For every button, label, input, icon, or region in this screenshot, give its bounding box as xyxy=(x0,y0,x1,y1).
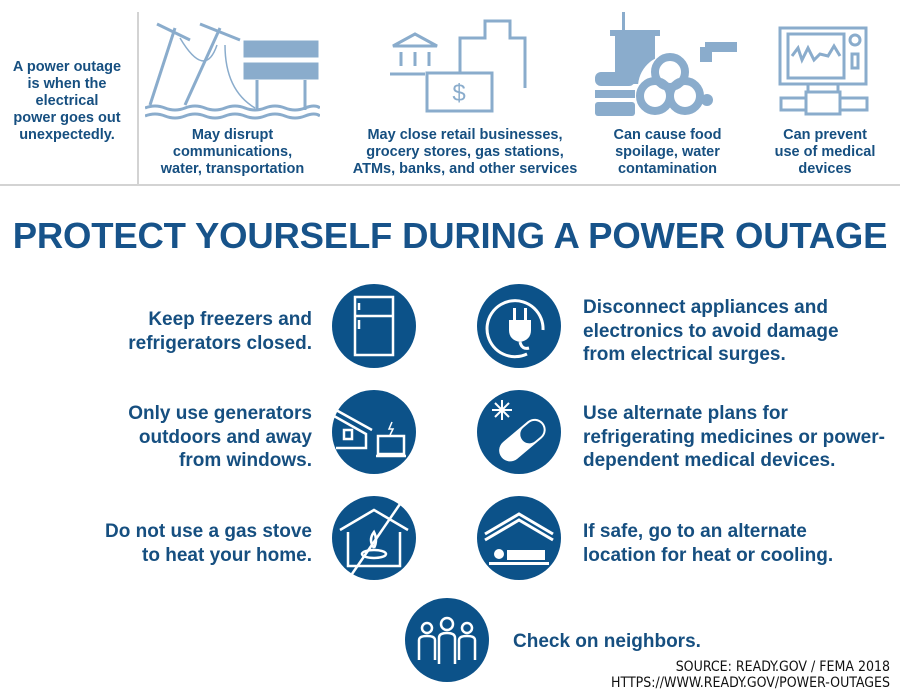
tip: generators: Only use generators xyxy=(128,403,312,424)
icon: fridge xyxy=(332,284,416,368)
tip: gas stove: to heat your home. xyxy=(142,544,312,566)
icon: poles and barricade xyxy=(145,22,320,120)
tip: medicines: Use alternate plans for xyxy=(583,403,788,424)
definition text: unexpectedly. xyxy=(19,127,115,143)
icon: no gas stove xyxy=(332,496,416,580)
caption: food spoilage xyxy=(614,127,721,177)
tip: medicines xyxy=(583,403,885,471)
tip: generators: from windows. xyxy=(179,450,312,471)
caption: medical devices: Can prevent xyxy=(783,127,867,143)
icon: neighbors xyxy=(405,598,489,682)
caption: close businesses: May close retail businesses, xyxy=(367,127,563,143)
icon: house and generator xyxy=(332,390,416,474)
tip: freezers: refrigerators closed. xyxy=(128,332,312,354)
source xyxy=(611,659,890,691)
caption: close businesses: ATMs, banks, and other services xyxy=(353,161,577,177)
tip: disconnect: Disconnect appliances and xyxy=(583,297,828,318)
caption: disrupt: water, transportation xyxy=(161,161,304,177)
definition text xyxy=(13,59,121,143)
tip: medicines: refrigerating medicines or power- xyxy=(583,426,885,448)
vertical divider xyxy=(137,12,139,184)
tip: disconnect: from electrical surges. xyxy=(583,344,786,365)
icon: shelter xyxy=(477,496,561,580)
caption: close businesses: grocery stores, gas stations, xyxy=(366,144,564,160)
caption: disrupt xyxy=(160,127,304,177)
tip: freezers xyxy=(128,309,312,354)
tip: neighbors: Check on neighbors. xyxy=(513,631,701,652)
tip: gas stove: Do not use a gas stove xyxy=(105,521,312,542)
tip: alternate location: location for heat or cooling. xyxy=(583,544,833,566)
icon: buildings and money xyxy=(390,20,526,112)
icon: buildings and money: $ xyxy=(452,80,466,107)
tip: alternate location xyxy=(583,521,833,566)
tip: disconnect xyxy=(583,297,839,365)
source: HTTPS://WWW.READY.GOV/POWER-OUTAGES xyxy=(611,675,890,691)
top strip bottom border xyxy=(0,184,900,186)
caption: food spoilage: contamination xyxy=(618,161,717,177)
definition text: power goes out xyxy=(13,110,121,126)
definition text: electrical xyxy=(36,93,98,109)
definition text: A power outage xyxy=(13,59,121,75)
icon: food and biohazard xyxy=(595,12,737,116)
title: PROTECT YOURSELF DURING A POWER OUTAGE xyxy=(13,215,887,256)
tip: disconnect: electronics to avoid damage xyxy=(583,320,839,342)
icon: pill and snowflake xyxy=(477,390,561,474)
tip: alternate location: If safe, go to an alternate xyxy=(583,521,807,542)
caption: food spoilage: spoilage, water xyxy=(615,144,720,160)
source: SOURCE: READY.GOV / FEMA 2018 xyxy=(676,659,890,675)
definition text: is when the xyxy=(28,76,106,92)
caption: medical devices: devices xyxy=(798,161,852,177)
caption: food spoilage: Can cause food xyxy=(614,127,721,143)
tip: gas stove xyxy=(105,521,312,566)
tip: generators: outdoors and away xyxy=(139,426,312,448)
caption: medical devices xyxy=(775,127,875,177)
caption: disrupt: May disrupt xyxy=(192,127,273,143)
icon: plug xyxy=(477,284,561,368)
tip: medicines: dependent medical devices. xyxy=(583,450,835,471)
caption: disrupt: communications, xyxy=(173,144,292,160)
tip: freezers: Keep freezers and xyxy=(148,309,312,330)
tip: generators xyxy=(128,403,312,471)
caption: medical devices: use of medical xyxy=(775,144,875,160)
caption: close businesses xyxy=(353,127,577,177)
icon: medical monitor xyxy=(778,26,868,116)
